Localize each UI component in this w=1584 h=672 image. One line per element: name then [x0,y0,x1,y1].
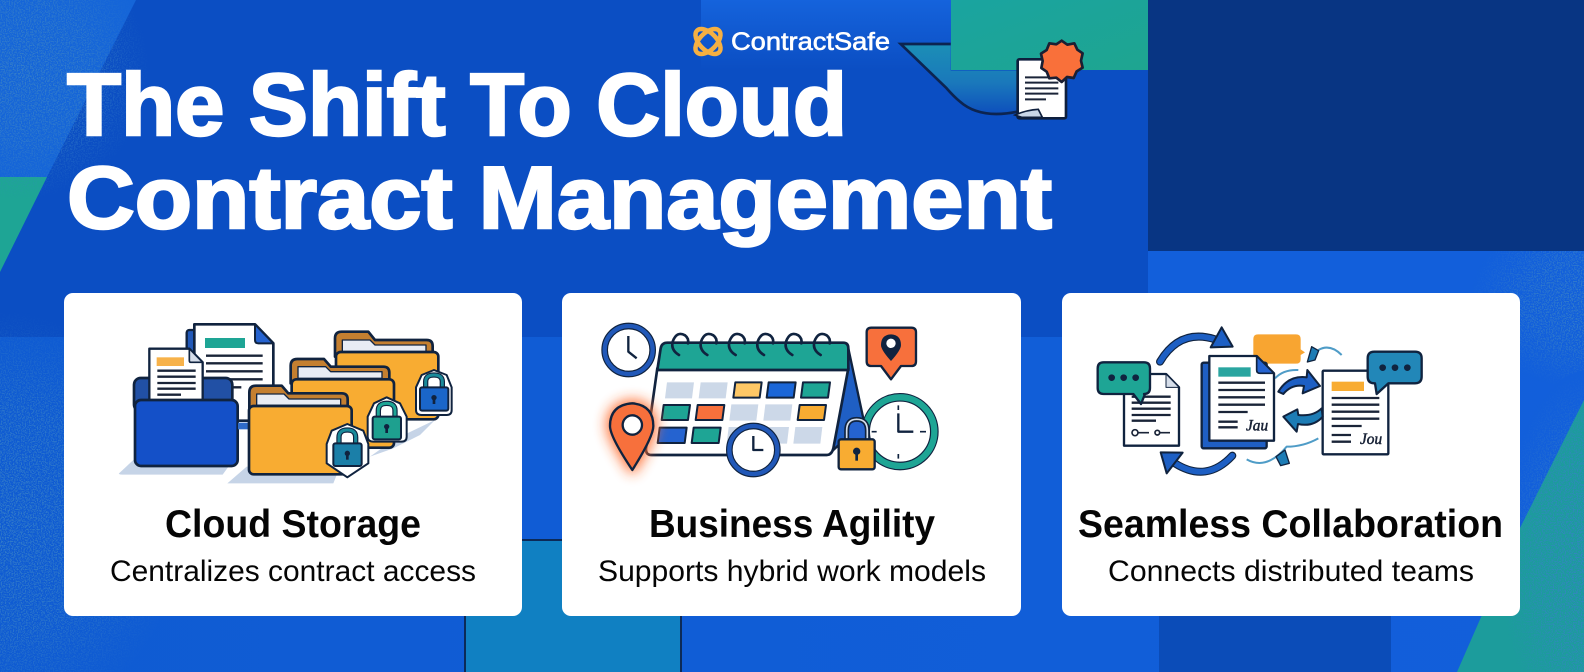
description: cloud storage: Centralizes contract access [110,555,476,588]
blue folder with document [134,349,250,466]
card background [562,293,1021,616]
card background [1062,293,1520,616]
teal chat bubble [1098,362,1150,404]
left document [1124,374,1179,446]
heading: business agility: Business Agility [649,503,935,546]
description: seamless collaboration: Connects distributed teams [1108,555,1474,588]
card background [64,293,522,616]
arrow: to centre document [1283,408,1323,432]
clock: bottom [729,426,777,474]
orange bubble [1253,334,1305,364]
folder front [249,386,352,474]
icon: folders with locks [119,324,452,483]
icon: shared documents with arrows [1098,327,1422,473]
folder middle [291,359,394,448]
calendar [646,334,864,455]
blue chat bubble [1368,352,1422,394]
logo wordmark: ContractSafe [731,28,890,56]
clock: top left [605,326,653,374]
logo: ContractSafe [691,25,890,58]
divider between cards [522,539,562,541]
large document [187,324,273,421]
clock: right [866,397,934,466]
lock: back [416,370,452,415]
centre document [1202,356,1274,448]
heading: seamless collaboration: Seamless Collaboration [1078,503,1503,546]
arrow: top cycle [1160,327,1233,362]
padlock [839,419,875,469]
description: business agility: Supports hybrid work models [598,555,986,588]
title [67,55,1052,247]
header document illustration [901,41,1083,118]
right document: Jou [1360,431,1382,448]
right document [1323,371,1388,454]
thin connector curves [1247,348,1342,463]
small arrow fragments [1276,347,1319,466]
document with seal [1015,41,1083,118]
panel: cloud storage [64,293,522,616]
icon: calendar with clocks and pins [605,326,934,474]
arrow: to right document [1278,370,1320,394]
lock: front [327,424,368,477]
panel: seamless collaboration [1062,293,1520,616]
swoosh [901,44,1017,115]
logo icon [691,25,725,58]
heading: cloud storage: Cloud Storage [165,503,421,546]
arrow: bottom cycle [1161,452,1232,473]
calendar cells [658,382,830,444]
title: The Shift To Cloud [67,55,847,154]
location bubble [867,328,916,379]
folder back [335,332,438,419]
pin with glow [610,403,653,470]
centre document: Jau [1246,418,1268,435]
title: Contract Management [67,148,1052,247]
teal header block [951,0,1148,70]
lock: middle [368,397,407,442]
panel: business agility [562,293,1021,616]
